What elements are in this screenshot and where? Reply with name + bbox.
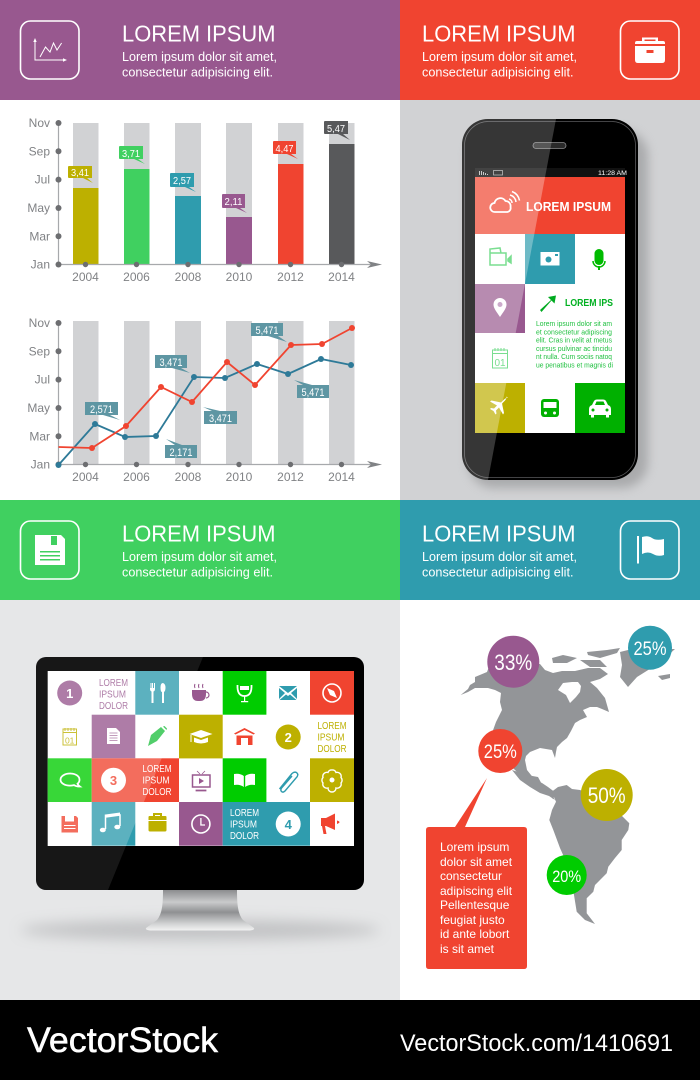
tile: number 4 with text bbox=[223, 802, 310, 846]
tile: cloud header: LOREM IPSUM bbox=[526, 199, 611, 214]
year labels: 2014 bbox=[328, 270, 355, 284]
value tags: 5,471 bbox=[302, 387, 324, 399]
tile: clock bbox=[179, 802, 223, 846]
tile: article: elit. Cras in velit at metus bbox=[536, 336, 612, 344]
bars bbox=[73, 144, 354, 264]
desktop monitor bbox=[20, 657, 380, 940]
tile: yellow text: LOREM bbox=[318, 721, 346, 732]
tile: number 4 with text: 4 bbox=[285, 817, 293, 832]
line chart bbox=[27, 316, 382, 484]
year labels: 2004 bbox=[72, 270, 99, 284]
icon: floppy disk bbox=[20, 521, 79, 579]
year labels: 2006 bbox=[123, 470, 150, 484]
description: Lorem ipsum dolor sit amet, bbox=[422, 549, 577, 564]
tile: compass bbox=[310, 671, 354, 715]
tile: article: ue penatibus et magnis di bbox=[536, 360, 613, 370]
description: consectetur adipisicing elit. bbox=[422, 565, 574, 580]
tile: number 3 with text: LOREM bbox=[142, 764, 172, 775]
axes bbox=[56, 320, 382, 468]
tile: yellow text: DOLOR bbox=[318, 744, 346, 755]
tile: plane bbox=[475, 383, 525, 433]
value tags: 3,471 bbox=[160, 357, 182, 369]
tile: number 3 with text: DOLOR bbox=[142, 787, 172, 798]
tile: floppy disk bbox=[62, 816, 78, 832]
tile: bus bbox=[541, 399, 559, 417]
tile: document bbox=[92, 715, 135, 758]
value tags: 3,471 bbox=[209, 413, 232, 425]
year labels: 2008 bbox=[175, 470, 202, 484]
tile: house bbox=[234, 728, 255, 745]
tile: yellow text bbox=[318, 721, 346, 755]
tile: speech bubble bbox=[48, 758, 92, 802]
south america bbox=[549, 785, 629, 924]
tile: article: LOREM IPS bbox=[565, 298, 613, 309]
tile: cutlery bbox=[135, 671, 179, 715]
callout text bbox=[440, 840, 513, 956]
header: teal flag banner bbox=[400, 500, 700, 600]
bubble: 50% bbox=[581, 769, 633, 821]
tile: article: nt nulla. Cum sociis natoq bbox=[536, 352, 612, 361]
callout text: consectetur bbox=[440, 869, 502, 883]
tile: flower gear bbox=[310, 758, 354, 802]
image url: VectorStock.com/1410691 bbox=[400, 1030, 673, 1057]
month labels: Nov bbox=[29, 316, 50, 330]
tile: music note bbox=[92, 802, 135, 846]
description: Lorem ipsum dolor sit amet, bbox=[122, 549, 277, 564]
tile: television bbox=[192, 771, 210, 791]
tile: calendar: 01 bbox=[65, 736, 75, 746]
central america link bbox=[512, 770, 555, 800]
description bbox=[122, 549, 277, 580]
tile: purple text bbox=[99, 678, 128, 712]
tile: article: cursus pulvinar ac tincidu bbox=[536, 344, 612, 353]
year labels: 2012 bbox=[277, 470, 304, 484]
tile: yellow text: IPSUM bbox=[318, 732, 344, 744]
monitor reflection bbox=[36, 657, 203, 890]
year labels bbox=[72, 470, 355, 484]
north america bbox=[461, 664, 609, 799]
red series bbox=[58, 325, 355, 451]
status bar: 11:28 AM bbox=[598, 170, 627, 177]
stand shadow bbox=[20, 920, 380, 940]
tile: article: Lorem ipsum dolor sit am bbox=[536, 319, 612, 328]
year labels bbox=[72, 270, 355, 284]
status bar bbox=[475, 168, 627, 177]
year labels: 2012 bbox=[277, 270, 304, 284]
tile: microphone bbox=[593, 249, 605, 270]
description bbox=[422, 549, 577, 580]
month labels: May bbox=[27, 201, 50, 215]
bar tracks bbox=[73, 123, 354, 264]
tile: open book bbox=[223, 758, 266, 802]
callout text: id ante lobort bbox=[440, 927, 510, 941]
callout text: Lorem ipsum bbox=[440, 840, 509, 854]
value tags: 2,57 bbox=[173, 176, 191, 187]
value tags: 2,571 bbox=[90, 404, 113, 416]
description: Lorem ipsum dolor sit amet, bbox=[122, 49, 277, 64]
callout text: is sit amet bbox=[440, 942, 495, 956]
value tags: 4,47 bbox=[276, 144, 294, 155]
bar chart bbox=[27, 116, 382, 284]
heading: LOREM IPSUM bbox=[122, 21, 276, 47]
hudson bay bbox=[558, 682, 581, 703]
value tags bbox=[68, 121, 350, 213]
screen reflection bbox=[48, 671, 180, 846]
tile: number 3 with text bbox=[92, 758, 179, 802]
callout text: feugiat justo bbox=[440, 913, 505, 927]
tile: camera bbox=[525, 234, 575, 284]
bubble: 20%: 20% bbox=[552, 867, 581, 886]
tile: article bbox=[536, 296, 613, 370]
tile: calendar: 01 bbox=[494, 358, 506, 369]
tile: coffee cup bbox=[192, 684, 209, 701]
callout text: dolor sit amet bbox=[440, 855, 513, 869]
arctic islands bbox=[552, 648, 620, 667]
value tags: 3,41 bbox=[71, 168, 89, 179]
value tags: 3,71 bbox=[122, 149, 140, 160]
bubble: 25% red bbox=[478, 729, 522, 773]
icon: flag bbox=[620, 521, 679, 579]
month labels: Jul bbox=[35, 373, 50, 387]
description: consectetur adipisicing elit. bbox=[422, 65, 574, 80]
tile: number 1: 1 bbox=[66, 686, 73, 701]
tile: briefcase bbox=[148, 813, 166, 832]
icon: line chart bbox=[20, 21, 79, 79]
callout text: Pellentesque bbox=[440, 898, 510, 912]
month labels: Mar bbox=[29, 229, 50, 243]
bubble: 25% red: 25% bbox=[484, 742, 517, 763]
callout bbox=[426, 778, 527, 969]
header: red briefcase banner bbox=[400, 0, 700, 100]
description bbox=[422, 49, 577, 80]
month labels: May bbox=[27, 401, 50, 415]
iceland bbox=[658, 674, 670, 680]
tile: number 4 with text: IPSUM bbox=[230, 820, 257, 830]
tile: purple text: DOLOR bbox=[99, 701, 128, 712]
greenland bbox=[620, 647, 675, 687]
tile: location pin bbox=[475, 284, 525, 333]
description: Lorem ipsum dolor sit amet, bbox=[422, 49, 577, 64]
monitor stand bbox=[146, 890, 254, 930]
tile: calendar bbox=[492, 348, 508, 369]
month labels: Jan bbox=[31, 458, 50, 472]
heading: LOREM IPSUM bbox=[422, 21, 576, 47]
month labels bbox=[27, 116, 50, 272]
month labels: Nov bbox=[29, 116, 50, 130]
description bbox=[122, 49, 277, 80]
column bands bbox=[73, 321, 354, 464]
value tags: 5,471 bbox=[256, 325, 278, 337]
phone body bbox=[462, 119, 638, 480]
year labels: 2014 bbox=[328, 470, 355, 484]
description: consectetur adipisicing elit. bbox=[122, 565, 273, 580]
glass reflection bbox=[462, 119, 556, 480]
year labels: 2004 bbox=[72, 470, 99, 484]
heading: LOREM IPSUM bbox=[122, 521, 276, 547]
tile: car bbox=[575, 383, 625, 433]
bubble: 25% teal bbox=[628, 626, 672, 670]
year labels: 2010 bbox=[226, 270, 253, 284]
month labels: Jul bbox=[35, 173, 50, 187]
blue series bbox=[56, 356, 354, 468]
screen grid bbox=[48, 671, 354, 846]
year labels: 2006 bbox=[123, 270, 150, 284]
tile: number 4 with text: DOLOR bbox=[230, 831, 259, 842]
month labels: Jan bbox=[31, 258, 50, 272]
value tags bbox=[85, 323, 329, 459]
tile: calendar bbox=[63, 728, 76, 746]
monitor body bbox=[36, 657, 364, 890]
tile: purple text: LOREM bbox=[99, 678, 128, 689]
tile: envelope bbox=[279, 686, 297, 700]
tile: video bbox=[490, 248, 511, 265]
heading: LOREM IPSUM bbox=[422, 521, 576, 547]
tile: fountain pen bbox=[148, 726, 167, 746]
tile: number 1 bbox=[57, 680, 82, 706]
year labels: 2010 bbox=[226, 470, 253, 484]
header: green save banner bbox=[0, 500, 400, 600]
tile: number 3 with text: 3 bbox=[110, 773, 117, 788]
footer bbox=[0, 1000, 700, 1080]
description: consectetur adipisicing elit. bbox=[122, 65, 273, 80]
phone shadow bbox=[468, 130, 648, 488]
callout text: adipiscing elit bbox=[440, 884, 513, 898]
screen tiles bbox=[475, 177, 625, 433]
year labels: 2008 bbox=[175, 270, 202, 284]
value tags: 2,11 bbox=[224, 197, 243, 208]
tile: number 4 with text: LOREM bbox=[230, 808, 259, 819]
brand logo text: VectorStock bbox=[27, 1021, 219, 1060]
bubble: 33% bbox=[487, 636, 539, 688]
bubble: 25% teal: 25% bbox=[634, 639, 667, 660]
map of the Americas bbox=[461, 626, 675, 924]
axes bbox=[56, 120, 382, 268]
speaker bbox=[533, 142, 566, 148]
tile: megaphone bbox=[321, 814, 340, 834]
month labels: Sep bbox=[29, 344, 50, 358]
month labels bbox=[27, 316, 50, 472]
value tags: 2,171 bbox=[170, 447, 192, 459]
tile: paperclip bbox=[280, 772, 298, 792]
month labels: Mar bbox=[29, 429, 50, 443]
tile: article: et consectetur adipiscing bbox=[536, 328, 612, 336]
icon: briefcase bbox=[620, 21, 679, 79]
bubble: 33%: 33% bbox=[494, 650, 532, 675]
value tags: 5,47 bbox=[327, 124, 345, 135]
tile: number 2: 2 bbox=[285, 730, 292, 745]
bubble: 50%: 50% bbox=[588, 783, 626, 808]
bubble: 20% bbox=[547, 855, 587, 895]
tile: graduation cap bbox=[179, 715, 223, 758]
header: purple chart banner bbox=[0, 0, 400, 100]
smartphone bbox=[462, 119, 648, 488]
tile: cloud header bbox=[475, 177, 625, 234]
tile: wine glass bbox=[223, 671, 266, 715]
month labels: Sep bbox=[29, 144, 50, 158]
tile: purple text: IPSUM bbox=[99, 690, 126, 701]
tile: number 2 bbox=[276, 724, 301, 750]
tile: number 3 with text: IPSUM bbox=[142, 776, 170, 786]
